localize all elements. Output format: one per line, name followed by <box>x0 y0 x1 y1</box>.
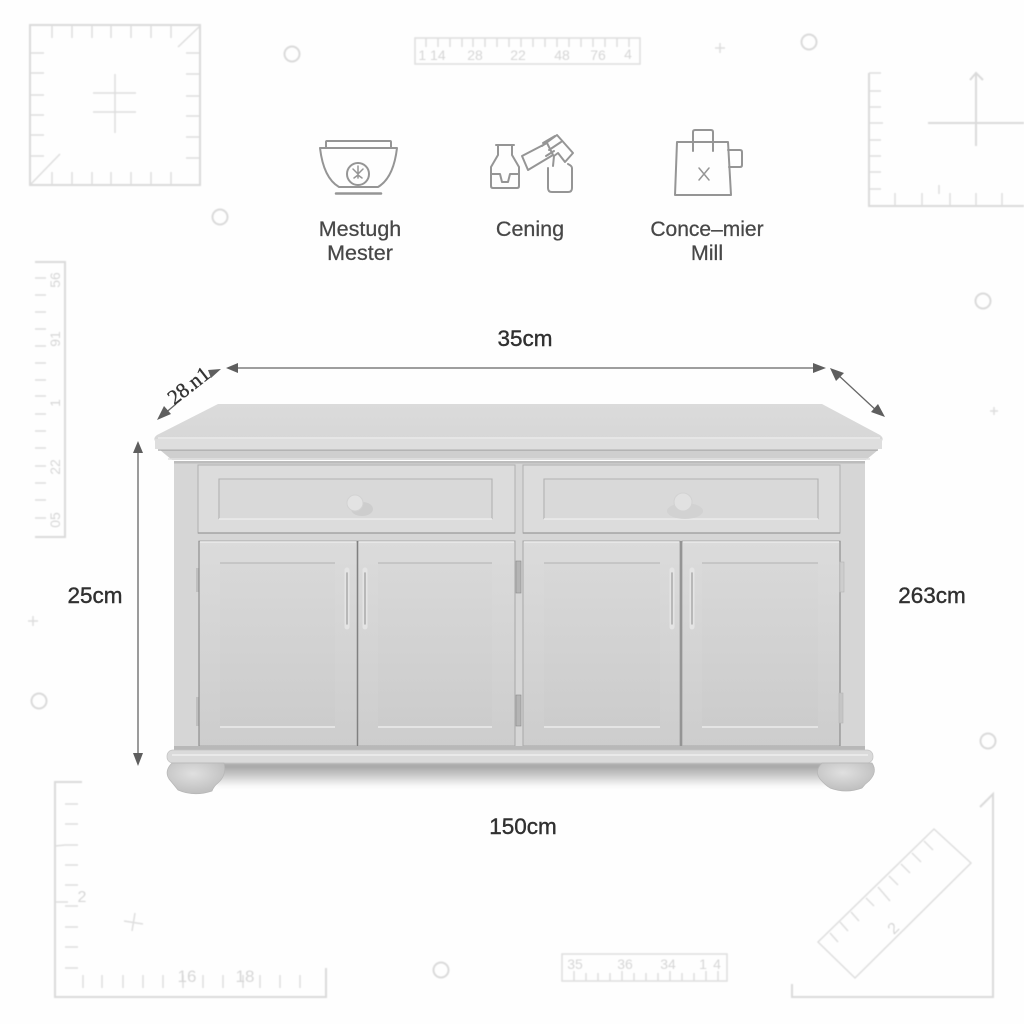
dimension: depth arrow right <box>830 368 885 417</box>
floor shadow <box>215 762 827 787</box>
vertical ruler left <box>35 262 65 537</box>
vertical ruler left: 91 <box>47 331 63 347</box>
ruler bottom centre: 36 <box>617 956 633 972</box>
left foot <box>167 763 225 794</box>
set square and angled ruler bottom right: 2 <box>885 920 903 938</box>
dimension label: 150cm: 150cm <box>489 814 557 839</box>
ruler bottom centre: 1 <box>699 956 707 972</box>
corner ruler bottom left <box>55 782 326 997</box>
vertical ruler left: 05 <box>47 512 63 528</box>
left drawer <box>198 465 515 533</box>
dimension label: 263cm: 263cm <box>898 583 966 608</box>
door 4 <box>682 541 840 746</box>
vertical ruler left: 56 <box>47 272 63 288</box>
ruler bottom centre: 35 <box>567 956 583 972</box>
door 2 <box>358 541 515 746</box>
ruler top centre: 48 <box>554 47 570 63</box>
ruler bottom centre: 34 <box>660 956 676 972</box>
cabinet top <box>154 404 883 464</box>
square ruler top left <box>30 25 200 185</box>
icon: bottle and sprayer <box>491 135 573 192</box>
ruler top centre: 22 <box>510 47 526 63</box>
vertical ruler left: 1 <box>47 399 63 407</box>
cabinet body <box>174 462 865 752</box>
dimension: height arrow <box>133 441 143 766</box>
corner ruler top right <box>869 73 1024 206</box>
icon: shopping bag <box>675 130 742 195</box>
plinth <box>167 746 873 763</box>
label: Mestugh Mester <box>319 217 401 265</box>
ruler top centre: 1 14 <box>418 47 446 63</box>
label: Conce-mier Mill <box>650 218 764 265</box>
ruler top centre <box>415 38 640 64</box>
dimension label: 28.n1: 28.n1 <box>163 361 215 409</box>
dimension: width arrow 35cm <box>226 363 826 373</box>
door 1 <box>199 541 357 746</box>
ruler bottom centre <box>562 954 727 981</box>
ruler bottom centre: 4 <box>713 956 721 972</box>
right foot <box>817 763 874 791</box>
dimension: depth arrow left <box>157 369 221 420</box>
label: Conce-mier Mill: Mill <box>691 241 723 265</box>
vertical ruler left: 22 <box>47 459 63 475</box>
ruler top centre: 28 <box>467 47 483 63</box>
corner ruler bottom left: 16 <box>178 967 196 986</box>
door handles <box>347 570 692 627</box>
door gap lines <box>199 541 840 746</box>
corner ruler bottom left: 2 <box>78 889 87 906</box>
dimension label: 25cm: 25cm <box>67 583 123 608</box>
label: Cening: Cening <box>496 217 564 241</box>
door 3 <box>523 541 680 746</box>
icon: bowl <box>320 141 397 194</box>
ruler top centre: 76 <box>590 47 606 63</box>
label: Conce-mier Mill: Conce–mier <box>650 218 764 241</box>
ruler top centre: 4 <box>624 46 632 62</box>
dimension label: 35cm: 35cm <box>497 326 553 351</box>
corner ruler bottom left: 18 <box>236 967 254 986</box>
right drawer <box>523 465 840 533</box>
set square and angled ruler bottom right <box>792 794 993 997</box>
label: Mestugh Mester: Mestugh <box>319 217 401 241</box>
door hinges <box>196 561 844 726</box>
label: Mestugh Mester: Mester <box>327 241 393 265</box>
cabinet illustration <box>154 404 883 794</box>
